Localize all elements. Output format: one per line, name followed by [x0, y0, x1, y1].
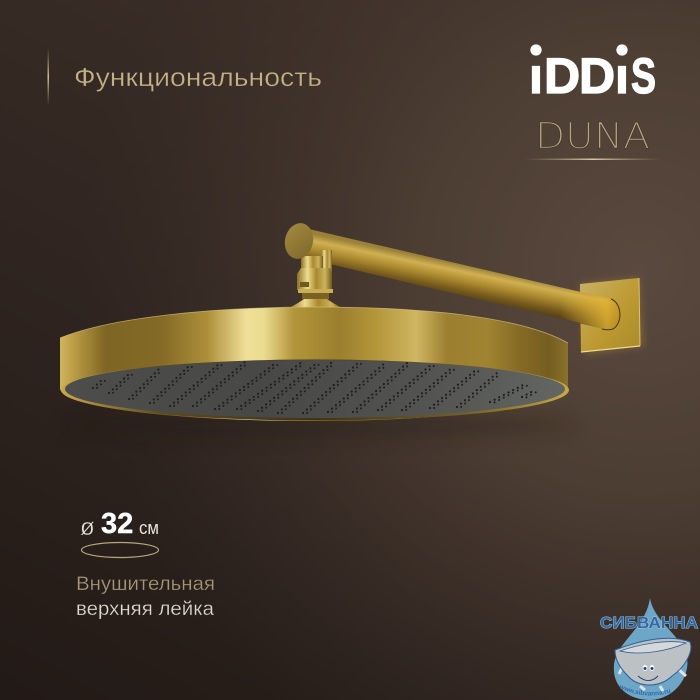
- brand logo: IDDIS: D: [544, 48, 580, 104]
- seller url: www.sibvanna.ru: [620, 685, 670, 696]
- spray face: [65, 360, 565, 418]
- vertical accent line: [48, 48, 49, 106]
- diameter value: см: [139, 518, 159, 538]
- brand logo: IDDIS: S: [631, 48, 656, 104]
- diameter value: 32: [101, 508, 133, 540]
- water drop: [614, 598, 687, 700]
- icon: diameter ellipse: [82, 542, 158, 558]
- brand logo: IDDIS: D: [579, 48, 615, 104]
- diameter value: ø: [80, 514, 95, 541]
- arm: [300, 227, 620, 330]
- divider under series name: [525, 158, 661, 160]
- brand logo: IDDIS: ı: [529, 48, 543, 104]
- seller name: СИБВАННА: [600, 615, 698, 632]
- swivel connector: [289, 250, 342, 308]
- head top rim highlight: [60, 307, 568, 343]
- brand logo: IDDIS: [529, 45, 656, 104]
- brand logo: IDDIS: ı: [615, 48, 629, 104]
- description text: верхняя лейка: [76, 599, 214, 620]
- description text: Внушительная: [76, 574, 215, 595]
- wall glow and shadow: [60, 278, 644, 438]
- series name: DUNA: DUNA: [535, 116, 650, 157]
- shower head product illustration: [60, 220, 644, 438]
- head body: [60, 307, 568, 421]
- head lower lip: [61, 360, 569, 420]
- wall mounting plate: [580, 278, 640, 352]
- seller logo: Sibvanna: [600, 598, 698, 700]
- arm end cap: [282, 220, 316, 262]
- diameter value: [80, 508, 159, 541]
- heading: Функциональность: [74, 62, 322, 92]
- description text: [76, 574, 215, 620]
- spray nozzles: [93, 362, 537, 415]
- icon: bathtub: [615, 638, 691, 691]
